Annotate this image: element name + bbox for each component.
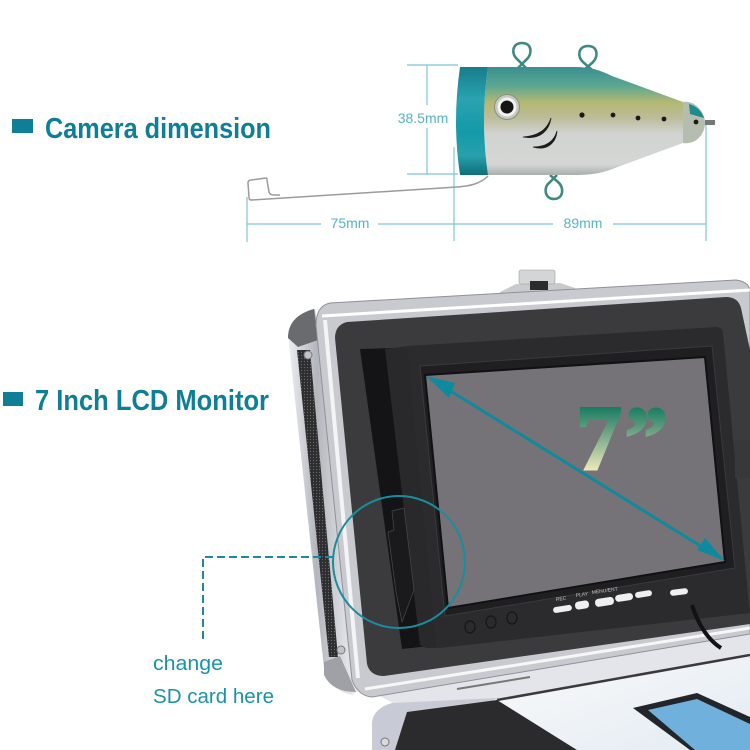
mounting loops bbox=[513, 43, 597, 199]
monitor cable bbox=[692, 605, 721, 648]
callout text: change SD card here: SD card here bbox=[153, 686, 274, 708]
button labels: MENU/ENT bbox=[591, 586, 618, 596]
SD card slot bbox=[388, 508, 414, 622]
monitor side tab bbox=[735, 440, 750, 478]
monitor bezel bbox=[407, 327, 750, 648]
camera ring bbox=[456, 67, 488, 175]
seven inch label: 7 bbox=[576, 387, 622, 489]
case base foam bbox=[395, 700, 577, 750]
aluminum lid frame bbox=[316, 280, 750, 697]
paper area inside base bbox=[497, 655, 750, 750]
camera eye bbox=[494, 94, 520, 120]
dimension labels: 38.5mm bbox=[398, 110, 448, 126]
base rivet bbox=[381, 738, 389, 746]
mesh strip bbox=[297, 350, 338, 657]
monitor inner bezel bbox=[420, 346, 735, 616]
dimension labels bbox=[331, 110, 602, 231]
case side handle strip bbox=[288, 309, 360, 695]
rivets bbox=[304, 351, 345, 654]
round monitor indicators bbox=[465, 612, 517, 633]
monitor side bbox=[385, 346, 437, 648]
dimension labels: 89mm bbox=[564, 215, 602, 231]
seven inch label: ” bbox=[625, 389, 668, 485]
monitor back and mount bbox=[360, 348, 430, 649]
diagonal double arrow bbox=[426, 376, 725, 561]
fish camera bbox=[248, 43, 715, 200]
camera dimension lines bbox=[247, 65, 706, 242]
screen bbox=[425, 357, 725, 608]
callout text: change SD card here: change bbox=[153, 653, 223, 675]
heading: camera dimension: Camera dimension bbox=[45, 113, 271, 145]
camera gills bbox=[523, 118, 557, 148]
dimension labels: 75mm bbox=[331, 215, 369, 231]
case latch bbox=[500, 270, 575, 294]
SD card callout circle bbox=[333, 496, 465, 628]
camera body bbox=[484, 67, 683, 175]
camera dots bbox=[579, 112, 698, 124]
manual booklet screen bbox=[633, 693, 750, 750]
callout text: change SD card here bbox=[153, 653, 274, 708]
black lid liner bbox=[335, 297, 750, 676]
hinge band below lid bbox=[372, 630, 750, 704]
camera hook wire bbox=[248, 176, 488, 200]
briefcase with monitor bbox=[288, 270, 750, 750]
camera nose cap bbox=[683, 102, 705, 143]
case base frame bbox=[372, 698, 497, 750]
corner caps bbox=[288, 309, 318, 347]
button labels: REC bbox=[555, 596, 567, 603]
button labels bbox=[555, 586, 618, 603]
monitor buttons bbox=[553, 588, 688, 613]
dashed leader line bbox=[203, 557, 333, 642]
button labels: PLAY bbox=[575, 591, 589, 599]
heading: 7 inch LCD monitor: 7 Inch LCD Monitor bbox=[35, 385, 269, 417]
